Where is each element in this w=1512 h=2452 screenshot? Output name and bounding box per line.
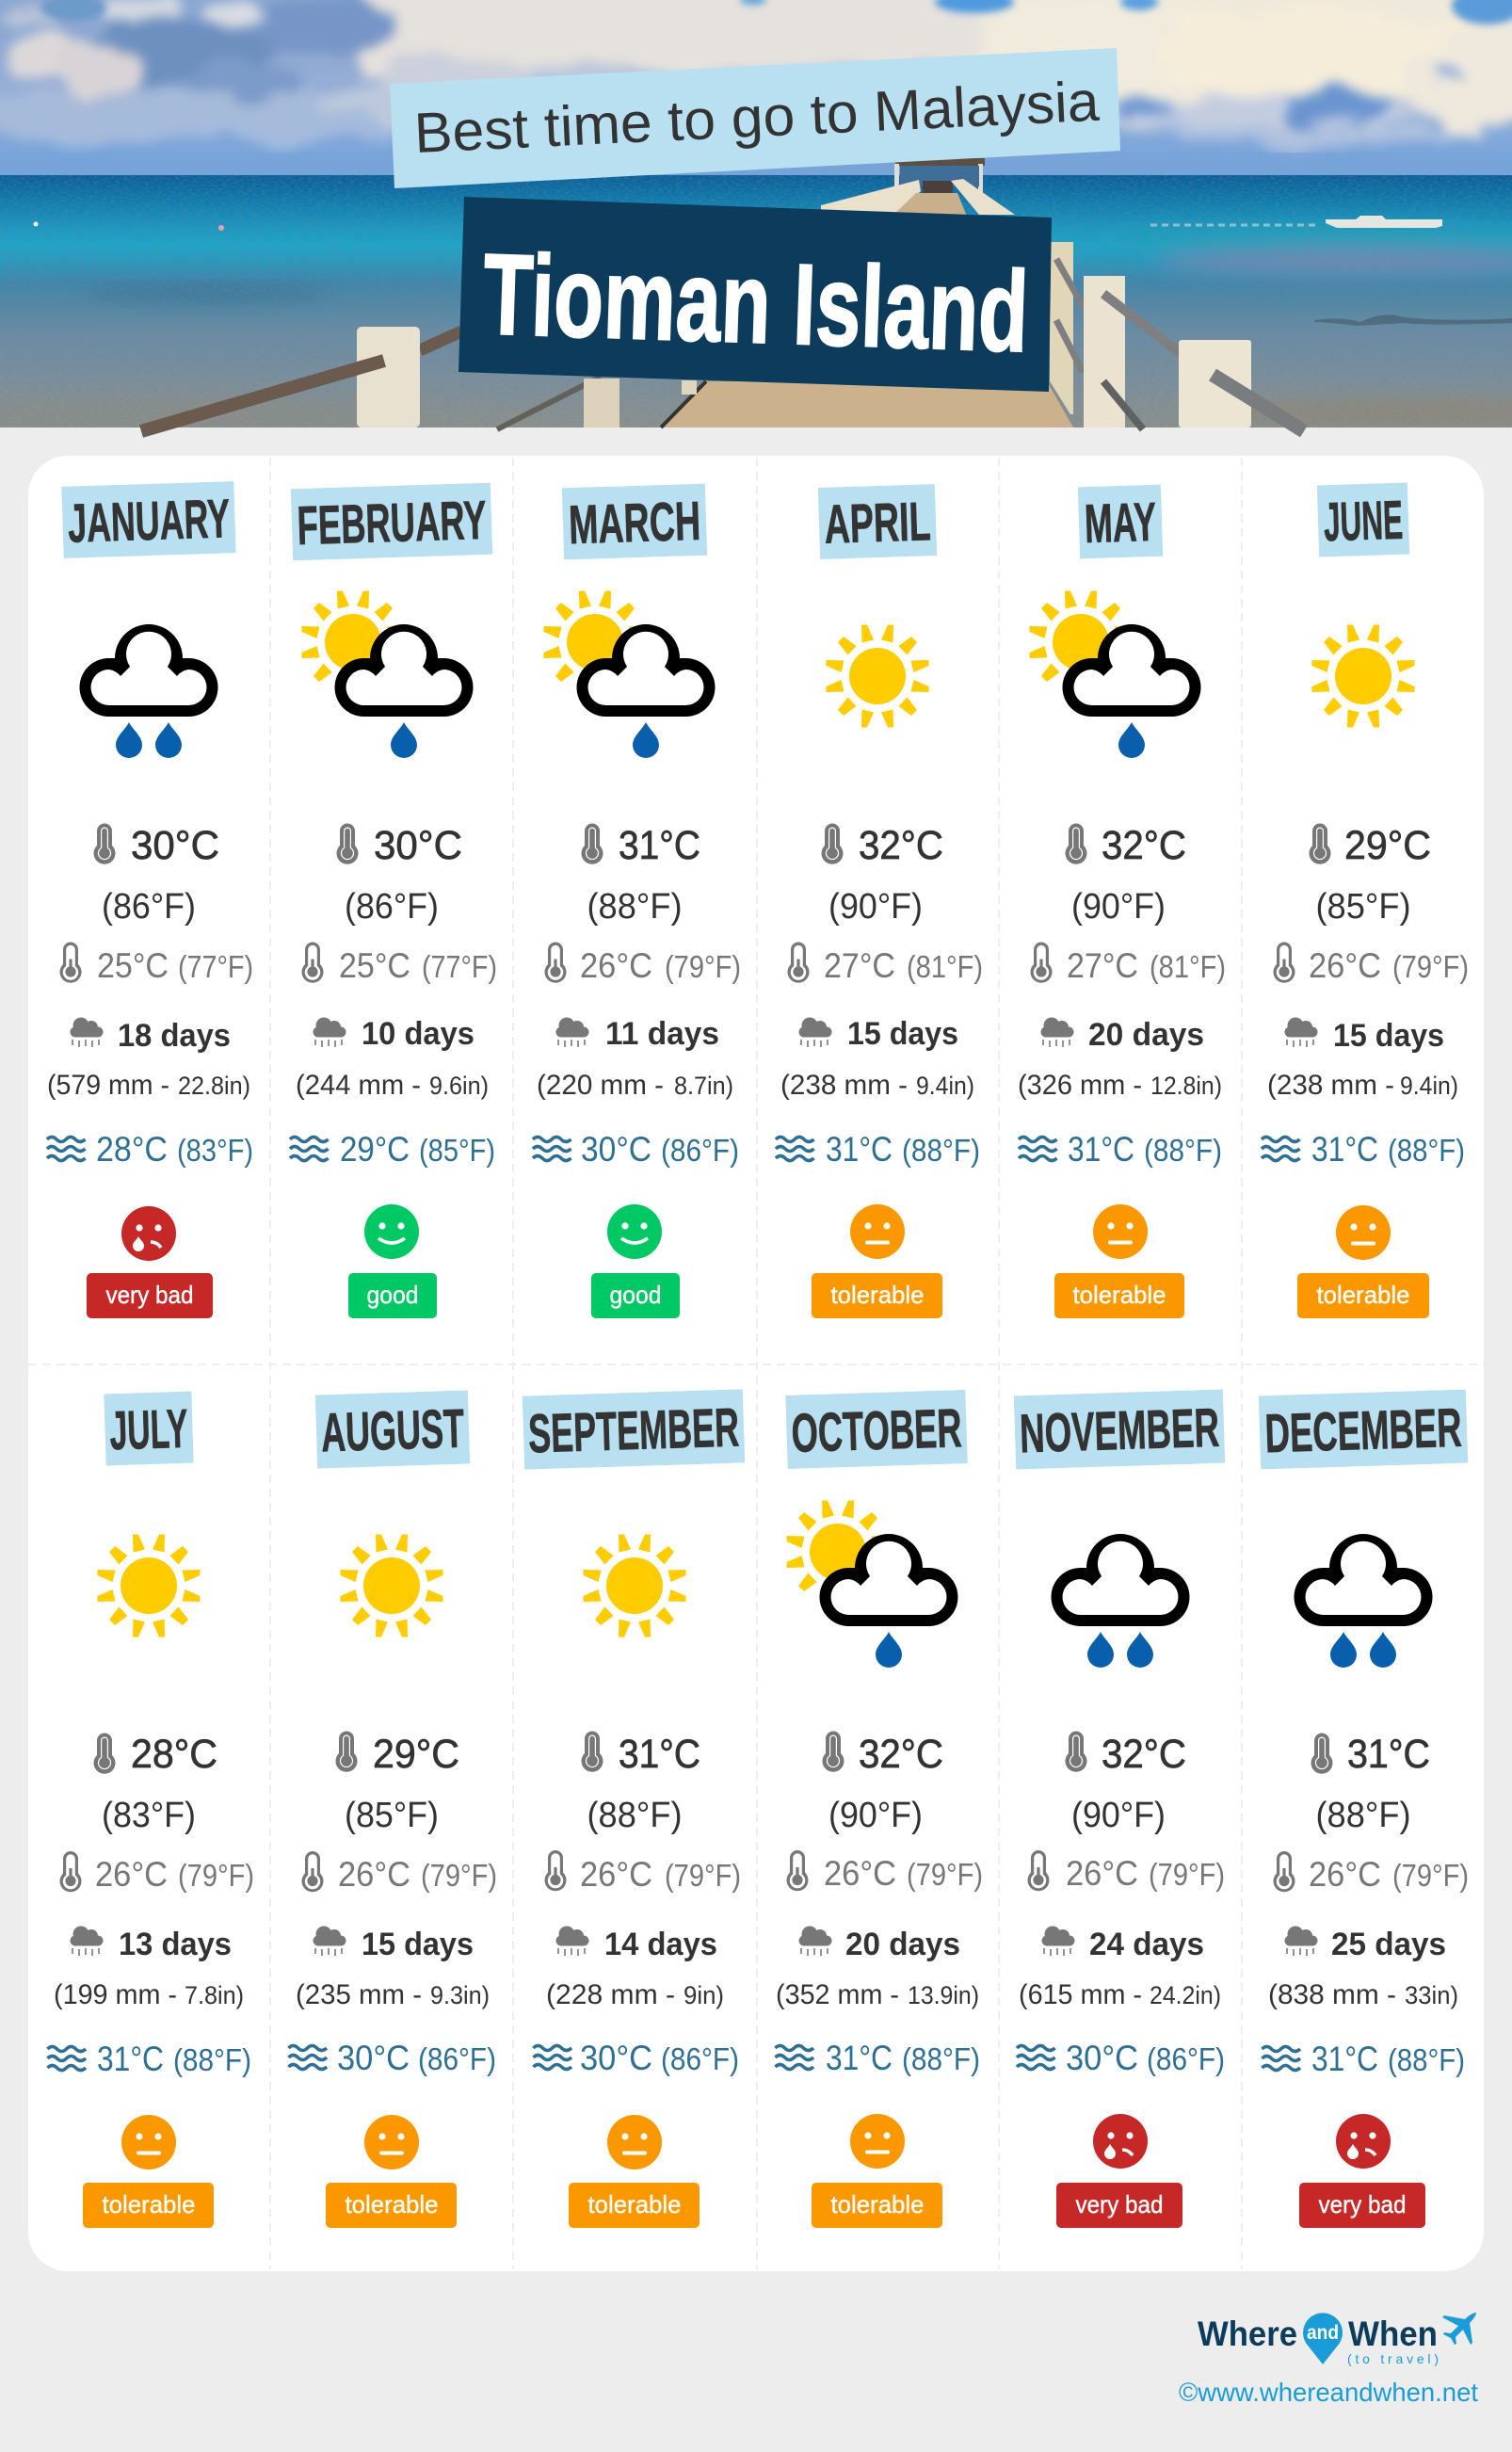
panel: September <box>523 1389 745 2228</box>
rating: tolerable <box>1054 1204 1184 1318</box>
high temperature <box>94 823 219 868</box>
high temperature Fahrenheit: (90°F) <box>1071 887 1166 927</box>
sea temperature: 30°C <box>581 1130 651 1169</box>
rainfall: 22.8in) <box>178 1072 250 1100</box>
month label <box>1317 483 1409 557</box>
month label: MAY <box>1084 492 1157 555</box>
rainfall <box>1268 1979 1458 2010</box>
low temperature: (81°F) <box>907 949 983 984</box>
high temperature Fahrenheit: (90°F) <box>828 887 923 927</box>
high temperature Fahrenheit: (88°F) <box>1316 1796 1410 1835</box>
sea temperature <box>47 1130 253 1169</box>
rating: tolerable: tolerable <box>830 2190 925 2218</box>
rainfall: 9.3in) <box>430 1981 490 2009</box>
rainfall <box>47 1070 250 1101</box>
low temperature: (77°F) <box>178 949 253 984</box>
low temperature: 26°C <box>580 1855 652 1894</box>
high temperature <box>1311 1732 1430 1777</box>
panel: May <box>1018 485 1226 1318</box>
high temperature: 31°C <box>619 1732 700 1777</box>
high temperature <box>337 823 462 868</box>
rainfall <box>54 1979 244 2010</box>
panel: October <box>776 1390 983 2228</box>
panel: December <box>1259 1390 1469 2228</box>
low temperature: 26°C <box>1309 1855 1381 1894</box>
sea temperature: (88°F) <box>902 2041 980 2076</box>
sea temperature <box>1019 1130 1222 1169</box>
rainfall: 7.8in) <box>185 1981 244 2009</box>
icon: jetty walkway <box>659 381 1073 427</box>
rainy days <box>313 1016 475 1052</box>
rating: good <box>591 1204 680 1318</box>
rating: tolerable <box>326 2115 457 2228</box>
high temperature: 31°C <box>1347 1732 1430 1777</box>
rating: tolerable <box>812 2114 942 2228</box>
panel: February <box>290 483 497 1318</box>
low temperature: (79°F) <box>421 1858 497 1893</box>
high temperature <box>335 1731 459 1777</box>
rainfall: (838 mm - <box>1268 1979 1396 2010</box>
month label <box>818 484 937 559</box>
rating: tolerable <box>1297 1205 1429 1318</box>
rainfall <box>780 1070 974 1101</box>
high temperature: 32°C <box>1102 1732 1186 1777</box>
low temperature: (77°F) <box>422 949 497 984</box>
panel: March <box>533 484 741 1318</box>
rainfall: (244 mm - <box>296 1070 421 1101</box>
month label: JUNE <box>1323 490 1404 553</box>
rainfall: (238 mm - <box>1267 1070 1394 1101</box>
wave crest <box>1314 315 1512 326</box>
rating: tolerable <box>569 2115 700 2228</box>
rainy days: 15 days <box>362 1927 474 1962</box>
rating: very bad <box>1299 2114 1425 2228</box>
sea temperature: 30°C <box>337 2039 410 2077</box>
high temperature <box>582 823 700 868</box>
low temperature <box>787 1850 983 1893</box>
low temperature <box>301 942 497 985</box>
rating: tolerable: tolerable <box>1073 1281 1166 1309</box>
buoys <box>34 222 224 231</box>
sea temperature <box>1017 2039 1225 2077</box>
icon: sun and cloud with rain <box>1030 591 1201 758</box>
high temperature Fahrenheit: (83°F) <box>102 1796 196 1835</box>
month label: SEPTEMBER <box>527 1396 740 1465</box>
high temperature <box>1309 823 1431 868</box>
sea temperature: 31°C <box>1311 2040 1378 2078</box>
logo: Where and When (to travel): and <box>1307 2322 1339 2344</box>
month label <box>562 484 707 559</box>
rainfall <box>776 1979 979 2010</box>
title banner <box>458 197 1052 392</box>
sea temperature: (88°F) <box>1388 1133 1465 1168</box>
rainy days: 14 days <box>604 1927 717 1962</box>
low temperature: (79°F) <box>907 1857 983 1892</box>
panel: June <box>1262 483 1469 1318</box>
rainy days: 18 days <box>118 1018 231 1054</box>
icon: far jetty and hut <box>821 158 1015 218</box>
low temperature: (79°F) <box>665 949 741 984</box>
rainfall: (579 mm - <box>47 1070 169 1101</box>
sea temperature: (86°F) <box>1147 2041 1225 2076</box>
month label <box>523 1389 745 1470</box>
low temperature: 25°C <box>339 946 410 985</box>
sea temperature: 30°C <box>580 2039 652 2077</box>
high temperature: 28°C <box>131 1732 217 1777</box>
high temperature: 29°C <box>373 1732 459 1777</box>
high temperature Fahrenheit: (88°F) <box>587 887 682 927</box>
sea temperature: (83°F) <box>177 1133 253 1168</box>
high temperature Fahrenheit: (90°F) <box>1071 1796 1166 1835</box>
rating: very bad: very bad <box>1318 2190 1407 2218</box>
rainfall: 9.6in) <box>429 1072 489 1100</box>
icon: sun <box>341 1535 442 1637</box>
high temperature: 29°C <box>1344 823 1431 868</box>
high temperature Fahrenheit: (88°F) <box>587 1796 682 1835</box>
subtitle banner: Best time to go to Malaysia <box>412 70 1101 165</box>
sea temperature: 31°C <box>97 2040 164 2078</box>
rainfall <box>1267 1070 1458 1101</box>
month label: JANUARY <box>67 488 231 555</box>
rating: tolerable: tolerable <box>345 2190 439 2218</box>
logo: Where and When (to travel) <box>1198 2313 1476 2366</box>
sea temperature <box>776 1130 980 1169</box>
rainy days: 15 days <box>847 1016 958 1052</box>
low temperature <box>544 942 741 985</box>
low temperature <box>60 1851 254 1894</box>
low temperature <box>1273 1851 1469 1894</box>
sea temperature <box>533 2039 739 2077</box>
month label: FEBRUARY <box>297 490 488 557</box>
low temperature: (79°F) <box>178 1858 254 1893</box>
rainy days: 13 days <box>119 1927 232 1962</box>
panel: July <box>47 1392 254 2228</box>
high temperature <box>94 1732 217 1777</box>
rainfall: 9.4in) <box>1400 1072 1458 1100</box>
sea temperature <box>1262 1130 1465 1169</box>
sea temperature: 28°C <box>96 1130 168 1169</box>
rating: tolerable: tolerable <box>587 2190 682 2218</box>
high temperature Fahrenheit: (90°F) <box>828 1796 923 1835</box>
high temperature <box>1066 823 1186 868</box>
icon: sun and cloud with rain <box>787 1501 958 1668</box>
low temperature: 26°C <box>95 1855 168 1894</box>
rainy days <box>1284 1017 1444 1054</box>
high temperature: 30°C <box>374 823 462 868</box>
sea temperature <box>290 1130 495 1169</box>
rainy days: 15 days <box>1333 1018 1444 1054</box>
rainfall <box>296 1070 489 1101</box>
rating: tolerable: tolerable <box>102 2190 196 2218</box>
rainfall: 24.2in) <box>1150 1981 1221 2009</box>
month label <box>104 1392 194 1465</box>
rating: good: good <box>367 1281 418 1309</box>
month label: AUGUST <box>320 1398 465 1463</box>
panel: November <box>1014 1390 1225 2228</box>
low temperature <box>60 942 253 985</box>
rainy days <box>70 1017 231 1054</box>
rating: good <box>348 1204 437 1318</box>
rainy days: 20 days <box>1088 1017 1204 1053</box>
sea temperature: (86°F) <box>661 1133 739 1168</box>
rainy days <box>70 1927 232 1962</box>
high temperature: 32°C <box>859 823 943 868</box>
high temperature Fahrenheit: (85°F) <box>345 1796 439 1835</box>
rainy days: 11 days <box>605 1016 719 1052</box>
subtitle banner <box>390 48 1120 188</box>
website credit: ©www.whereandwhen.net <box>1179 2378 1478 2407</box>
low temperature: (79°F) <box>1149 1857 1225 1892</box>
month label: MARCH <box>568 491 701 556</box>
logo: Where and When (to travel): (to travel) <box>1347 2351 1439 2366</box>
rainy days: 24 days <box>1089 1927 1204 1962</box>
rainfall <box>1019 1979 1221 2010</box>
sea temperature: (88°F) <box>902 1133 980 1168</box>
high temperature: 30°C <box>131 823 219 868</box>
rainy days: 25 days <box>1331 1927 1446 1962</box>
low temperature <box>301 1851 497 1894</box>
low temperature <box>1273 942 1469 985</box>
high temperature: 32°C <box>1102 823 1186 868</box>
month label: JULY <box>109 1398 189 1461</box>
month label <box>1078 485 1163 558</box>
high temperature <box>1066 1731 1186 1777</box>
rainfall <box>296 1979 490 2010</box>
sea temperature: (88°F) <box>1144 1133 1222 1168</box>
rainfall: 13.9in) <box>908 1981 979 2009</box>
low temperature: 27°C <box>824 946 895 985</box>
rating: tolerable: tolerable <box>830 1281 925 1309</box>
rainy days <box>1284 1927 1446 1962</box>
rainfall: (228 mm - <box>546 1979 675 2010</box>
sea temperature: 31°C <box>826 2039 893 2077</box>
rating: tolerable <box>812 1204 942 1318</box>
sea temperature: 31°C <box>1068 1130 1134 1169</box>
sea temperature: (88°F) <box>173 2042 251 2077</box>
rating: tolerable <box>83 2115 214 2228</box>
sea temperature: 29°C <box>340 1130 410 1169</box>
month label <box>61 481 236 558</box>
high temperature Fahrenheit: (86°F) <box>102 887 196 927</box>
rainfall <box>1018 1070 1222 1101</box>
rainy days: 20 days <box>845 1927 960 1962</box>
sea temperature <box>47 2040 251 2078</box>
sea temperature: (85°F) <box>419 1133 495 1168</box>
rainy days <box>555 1927 717 1962</box>
rainfall: 9.4in) <box>916 1072 974 1100</box>
high temperature Fahrenheit: (85°F) <box>1316 887 1410 927</box>
rating: very bad <box>87 1206 213 1318</box>
sea temperature: (86°F) <box>661 2041 739 2076</box>
sea temperature: 31°C <box>1311 1130 1378 1169</box>
high temperature: 31°C <box>619 823 700 868</box>
rainfall: (326 mm - <box>1018 1070 1142 1101</box>
low temperature <box>787 942 983 985</box>
icon: sun <box>584 1535 685 1637</box>
icon: sun <box>98 1535 200 1637</box>
month label: APRIL <box>824 491 932 556</box>
rating: very bad <box>1056 2114 1182 2228</box>
icon: heavy rain <box>1051 1534 1190 1668</box>
rainy days: 10 days <box>362 1016 475 1052</box>
rainfall: (238 mm - <box>780 1070 908 1101</box>
rating: good: good <box>610 1281 661 1309</box>
low temperature: 26°C <box>338 1855 410 1894</box>
month label <box>291 483 492 560</box>
rainy days <box>555 1016 719 1052</box>
sea temperature: 30°C <box>1066 2039 1138 2077</box>
icon: sun <box>1312 625 1414 727</box>
sea temperature: (86°F) <box>418 2041 496 2076</box>
sea temperature <box>1262 2040 1465 2078</box>
icon: boat and floats <box>1150 216 1442 228</box>
low temperature: 26°C <box>1309 946 1381 985</box>
month label: NOVEMBER <box>1019 1397 1220 1464</box>
icon: sun <box>827 625 928 727</box>
rainfall: (615 mm - <box>1019 1979 1142 2010</box>
high temperature <box>821 823 943 868</box>
panel: August <box>288 1390 497 2228</box>
month label <box>785 1390 968 1469</box>
sea temperature: 31°C <box>826 1130 893 1169</box>
panel: calendar card <box>28 456 1484 2271</box>
high temperature Fahrenheit: (86°F) <box>345 887 439 927</box>
rainy days <box>798 1016 958 1052</box>
hero photo: sky, sea and jetty <box>0 0 1512 431</box>
icon: sun and cloud with rain <box>301 591 473 758</box>
rainfall: (220 mm - <box>537 1070 664 1101</box>
title banner: Tioman Island <box>481 230 1030 376</box>
low temperature: 25°C <box>97 946 169 985</box>
panel: January <box>47 481 253 1318</box>
low temperature <box>1030 942 1226 985</box>
sea temperature: (88°F) <box>1388 2042 1465 2077</box>
sea temperature <box>776 2039 980 2077</box>
rainfall: (235 mm - <box>296 1979 422 2010</box>
icon: railing posts <box>141 242 1304 431</box>
low temperature: 26°C <box>824 1854 896 1893</box>
low temperature <box>1028 1850 1225 1893</box>
sea temperature <box>288 2039 496 2077</box>
rating: very bad: very bad <box>1075 2190 1164 2218</box>
sea temperature <box>533 1130 739 1169</box>
low temperature: 27°C <box>1067 946 1138 985</box>
rainy days <box>1041 1927 1204 1962</box>
rainfall: 8.7in) <box>674 1072 733 1100</box>
low temperature: 26°C <box>580 946 652 985</box>
high temperature <box>823 1731 943 1777</box>
rainy days <box>313 1927 474 1962</box>
rainfall: 33in) <box>1405 1981 1458 2009</box>
month label: OCTOBER <box>791 1397 963 1464</box>
low temperature: (79°F) <box>1392 1858 1469 1893</box>
rainfall: 12.8in) <box>1150 1072 1222 1100</box>
low temperature: 26°C <box>1066 1854 1138 1893</box>
rainfall: (352 mm - <box>776 1979 899 2010</box>
logo: Where and When (to travel): When <box>1348 2315 1438 2353</box>
rating: very bad: very bad <box>105 1281 194 1309</box>
month label <box>1014 1390 1225 1469</box>
rainfall <box>537 1070 733 1101</box>
logo: Where and When (to travel): Where <box>1198 2315 1297 2353</box>
rainfall: 9in) <box>684 1981 724 2009</box>
high temperature <box>582 1731 700 1777</box>
low temperature: (81°F) <box>1150 949 1226 984</box>
icon: heavy rain <box>79 624 218 758</box>
month label <box>315 1390 470 1469</box>
low temperature: (79°F) <box>665 1858 741 1893</box>
rainy days <box>798 1927 960 1962</box>
rainfall: (199 mm - <box>54 1979 177 2010</box>
low temperature <box>544 1850 741 1894</box>
rating: tolerable: tolerable <box>1316 1281 1410 1309</box>
icon: heavy rain <box>1294 1534 1433 1668</box>
icon: sun and cloud with rain <box>544 591 716 758</box>
low temperature: (79°F) <box>1392 949 1469 984</box>
panel: April <box>776 484 983 1318</box>
high temperature: 32°C <box>859 1732 943 1777</box>
